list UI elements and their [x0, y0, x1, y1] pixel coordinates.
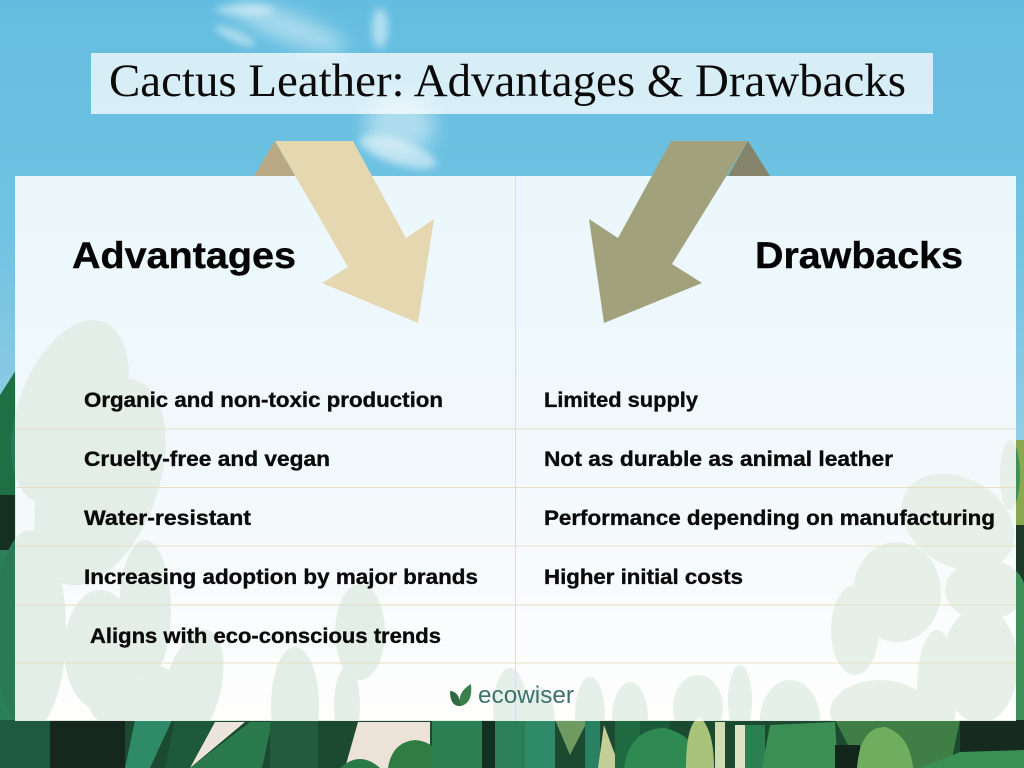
heading: advantages: Advantages: [72, 235, 296, 276]
arrow: drawbacks: [589, 141, 748, 323]
arrow fold shadows behind the panel: [254, 141, 770, 176]
list: advantages: Increasing adoption by major brands: [84, 566, 478, 589]
panel: translucent comparison table: [15, 176, 1016, 721]
list: advantages: [84, 389, 478, 648]
list: advantages: Organic and non-toxic production: [84, 389, 443, 412]
heading: drawbacks: Drawbacks: [755, 235, 963, 276]
list: drawbacks: [544, 389, 995, 589]
logo: ecowiser: ecowiser: [478, 682, 574, 709]
list: advantages: Water-resistant: [84, 507, 251, 530]
list: advantages: Cruelty-free and vegan: [84, 448, 330, 471]
title banner: Cactus Leather: Advantages & Drawbacks: [109, 55, 906, 107]
list: drawbacks: Limited supply: [544, 389, 698, 412]
list: drawbacks: Not as durable as animal leather: [544, 448, 893, 471]
list: drawbacks: Performance depending on manufacturing: [544, 507, 995, 530]
list: advantages: Aligns with eco-conscious trends: [90, 625, 441, 648]
list: drawbacks: Higher initial costs: [544, 566, 743, 589]
arrow: advantages: [275, 141, 434, 323]
